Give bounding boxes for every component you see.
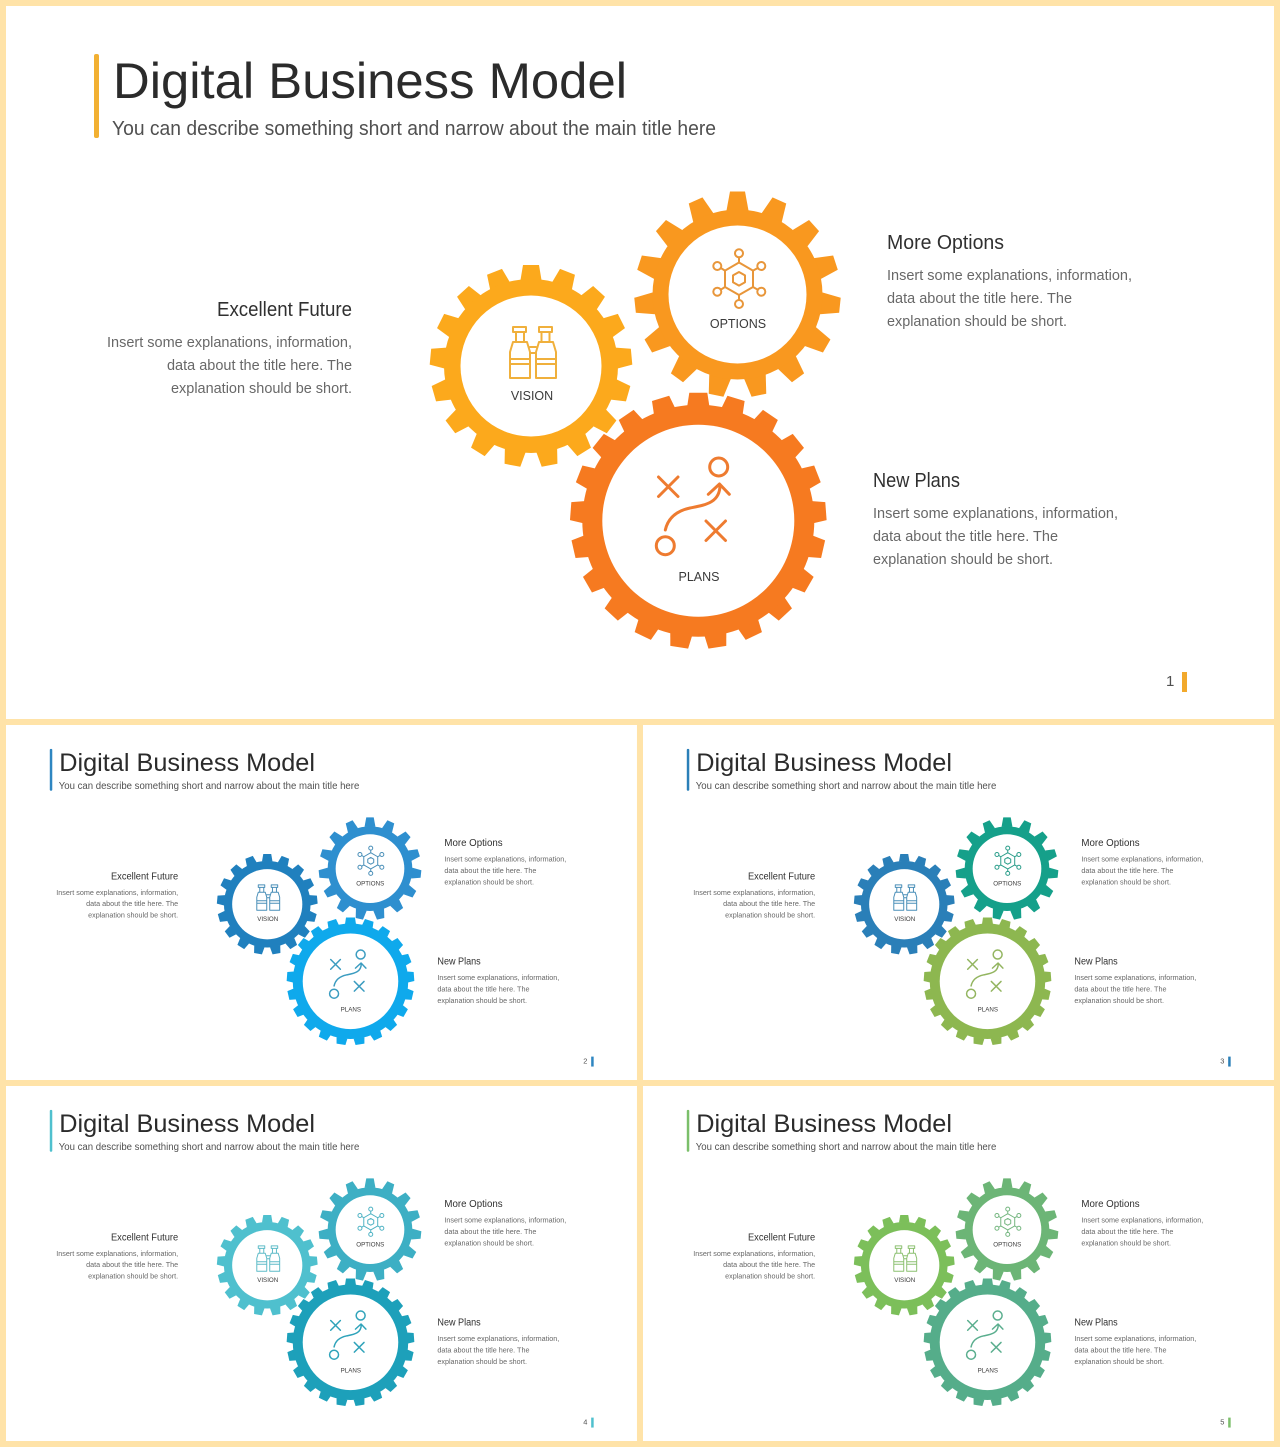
slide 3 text: more options: data about the title here. The [1081, 866, 1173, 875]
slide 5 text: new plans: Insert some explanations, information, [1074, 1334, 1196, 1343]
slide 5 text: more options: data about the title here. The [1081, 1227, 1173, 1236]
slide 2 gear: plans: PLANS [341, 1006, 361, 1013]
slide 5 gear: plans [924, 1279, 1051, 1406]
slide 2 text: more options [444, 838, 566, 886]
slide 1 gear: options [634, 192, 841, 398]
slide 1 text: excellent future: data about the title here. The [167, 357, 352, 374]
slide 3 text: new plans: explanation should be short. [1074, 996, 1164, 1005]
slide 5 background [643, 1086, 1274, 1441]
slide 4 text: more options: data about the title here. The [444, 1227, 536, 1236]
slide 5 text: new plans [1074, 1317, 1196, 1366]
slide 4 text: excellent future: Excellent Future [111, 1232, 179, 1243]
slide 1 text: excellent future: Excellent Future [217, 299, 352, 321]
slide 4 gear: options [318, 1178, 422, 1281]
slide 1 page number: 1 [1166, 673, 1174, 690]
slide 4 background [6, 1086, 637, 1441]
slide 4 text: new plans [437, 1317, 559, 1366]
slide 3 text: more options: explanation should be short. [1081, 877, 1171, 886]
slide 1 gear: vision [429, 265, 633, 467]
slide 2 gear: plans [287, 918, 414, 1045]
slide 2 gear: vision: VISION [257, 916, 278, 923]
slide 5 title accent bar [687, 1110, 689, 1152]
slide 5 subtitle: You can describe something short and narrow about the main title here [696, 1142, 997, 1153]
slide 2 page number: 2 [583, 1057, 587, 1066]
slide 4 gear: vision: VISION [257, 1277, 278, 1284]
slide 4 text: new plans: data about the title here. The [437, 1345, 529, 1354]
slide 4 text: excellent future: data about the title here. The [86, 1260, 178, 1269]
slide 1 text: excellent future: Insert some explanations, information, [107, 334, 352, 351]
slide 2 text: new plans: New Plans [437, 956, 481, 967]
slide 4 text: more options: Insert some explanations, information, [444, 1215, 566, 1224]
slide 5 page number [1220, 1418, 1231, 1428]
slide 2 text: excellent future: Insert some explanations, information, [56, 888, 178, 897]
slide 4 text: excellent future: explanation should be short. [88, 1272, 178, 1281]
slide 2 text: excellent future: explanation should be short. [88, 911, 178, 920]
panel: slide 2 blue [6, 725, 637, 1080]
slide 5 text: more options: Insert some explanations, information, [1081, 1215, 1203, 1224]
slide 2 text: new plans: data about the title here. The [437, 984, 529, 993]
slide 4 text: more options [444, 1199, 566, 1247]
slide 5 gear: options [955, 1178, 1059, 1281]
slide 1 gear: options: OPTIONS [710, 317, 766, 331]
slide 5 gear: vision: VISION [894, 1277, 915, 1284]
slide 5 title: Digital Business Model [696, 1110, 952, 1138]
slide 4 title accent bar [50, 1110, 52, 1152]
slide 3 text: more options: More Options [1081, 838, 1140, 849]
slide 3 gear: options: OPTIONS [993, 880, 1021, 887]
slide 1 text: more options: explanation should be short. [887, 313, 1067, 330]
slide 3 text: more options: Insert some explanations, information, [1081, 854, 1203, 863]
slide 3 gear: plans: PLANS [978, 1006, 998, 1013]
slide 1 subtitle: You can describe something short and narrow about the main title here [112, 118, 716, 140]
slide 1 text: new plans: New Plans [873, 470, 960, 492]
slide 3 page number: 3 [1220, 1057, 1224, 1066]
slide 5 text: new plans: explanation should be short. [1074, 1357, 1164, 1366]
slide 4 subtitle: You can describe something short and narrow about the main title here [59, 1142, 360, 1153]
slide 3 text: new plans [1074, 956, 1196, 1005]
slide 5 text: excellent future: data about the title here. The [723, 1260, 815, 1269]
slide 1 text: more options [887, 232, 1132, 330]
slide 2 text: more options: More Options [444, 838, 503, 849]
slide 3 subtitle: You can describe something short and narrow about the main title here [696, 781, 997, 792]
slide 4 gear: options: OPTIONS [356, 1241, 384, 1248]
slide 2 text: more options: data about the title here. The [444, 866, 536, 875]
slide 2 title accent bar [50, 749, 52, 791]
slide 1 text: new plans: data about the title here. The [873, 528, 1058, 545]
slide 4 text: more options: More Options [444, 1199, 503, 1210]
slide 3 page number [1220, 1057, 1231, 1067]
slide 4 gear: plans [287, 1279, 414, 1406]
slide 5 text: excellent future: explanation should be short. [725, 1272, 815, 1281]
slide 2 page number [583, 1057, 594, 1067]
slide 1 text: more options: More Options [887, 232, 1004, 254]
slide 1 text: excellent future [107, 299, 352, 397]
slide 4 text: excellent future [56, 1232, 179, 1281]
slide 4 text: excellent future: Insert some explanations, information, [56, 1249, 178, 1258]
panel: slide 5 green [643, 1086, 1274, 1441]
slide 2 text: excellent future: Excellent Future [111, 871, 179, 882]
slide 4 text: new plans: explanation should be short. [437, 1357, 527, 1366]
slide 1 text: new plans: explanation should be short. [873, 551, 1053, 568]
slide 1 text: new plans [873, 470, 1118, 568]
slide 3 gear: options [955, 817, 1059, 920]
slide 4 text: new plans: New Plans [437, 1317, 481, 1328]
slide 4 page number: 4 [583, 1418, 587, 1427]
panel: slide 4 teal [6, 1086, 637, 1441]
slide 3 text: new plans: New Plans [1074, 956, 1118, 967]
slide 1 text: more options: Insert some explanations, information, [887, 267, 1132, 284]
slide 1 title: Digital Business Model [113, 53, 627, 109]
slide 3 text: excellent future: Insert some explanations, information, [693, 888, 815, 897]
slide 4 text: more options: explanation should be short. [444, 1238, 534, 1247]
panel: slide 1 orange [6, 6, 1274, 719]
slide 1 gear: vision: VISION [511, 389, 553, 403]
slide 2 text: new plans: Insert some explanations, information, [437, 973, 559, 982]
slide 1 gear: plans: PLANS [678, 570, 720, 584]
slide 5 text: excellent future [693, 1232, 816, 1281]
slide 1 text: excellent future: explanation should be short. [171, 380, 352, 397]
slide 1 page number [1166, 672, 1187, 692]
slide 3 text: more options [1081, 838, 1203, 886]
slide 5 gear: options: OPTIONS [993, 1241, 1021, 1248]
slide 4 gear: vision [217, 1215, 318, 1316]
slide 3 text: excellent future: Excellent Future [748, 871, 816, 882]
slide 3 text: excellent future [693, 871, 816, 920]
slide 2 text: more options: explanation should be short. [444, 877, 534, 886]
slide 5 gear: vision [854, 1215, 955, 1316]
slide 2 text: more options: Insert some explanations, information, [444, 854, 566, 863]
slide 2 title: Digital Business Model [59, 749, 315, 777]
slide 2 text: excellent future: data about the title here. The [86, 899, 178, 908]
slide 4 gear: plans: PLANS [341, 1367, 361, 1374]
slide 1 background [6, 6, 1274, 719]
slide 4 title: Digital Business Model [59, 1110, 315, 1138]
slide 3 text: new plans: Insert some explanations, information, [1074, 973, 1196, 982]
slide 2 gear: vision [217, 854, 318, 955]
slide 1 text: more options: data about the title here. The [887, 290, 1072, 307]
slide 5 text: new plans: New Plans [1074, 1317, 1118, 1328]
slide 1 gear: plans [570, 393, 827, 649]
slide 3 title accent bar [687, 749, 689, 791]
slide 2 gear: options [318, 817, 422, 920]
slide 3 text: excellent future: data about the title here. The [723, 899, 815, 908]
slide 2 text: excellent future [56, 871, 179, 920]
slide 2 text: new plans: explanation should be short. [437, 996, 527, 1005]
slide 5 gear: plans: PLANS [978, 1367, 998, 1374]
slide 2 text: new plans [437, 956, 559, 1005]
slide 1 text: new plans: Insert some explanations, information, [873, 505, 1118, 522]
slide 5 text: excellent future: Excellent Future [748, 1232, 816, 1243]
slide 1 title accent bar [94, 54, 99, 138]
slide 5 text: more options [1081, 1199, 1203, 1247]
slide 5 page number: 5 [1220, 1418, 1224, 1427]
slide 2 background [6, 725, 637, 1080]
slide 3 gear: vision [854, 854, 955, 955]
slide 3 gear: plans [924, 918, 1051, 1045]
slide 5 text: more options: More Options [1081, 1199, 1140, 1210]
slide 2 subtitle: You can describe something short and narrow about the main title here [59, 781, 360, 792]
slide 5 text: more options: explanation should be short. [1081, 1238, 1171, 1247]
slide 3 gear: vision: VISION [894, 916, 915, 923]
slide 5 text: excellent future: Insert some explanations, information, [693, 1249, 815, 1258]
slide 3 text: new plans: data about the title here. The [1074, 984, 1166, 993]
slide 4 text: new plans: Insert some explanations, information, [437, 1334, 559, 1343]
slide 4 page number [583, 1418, 594, 1428]
slide 3 title: Digital Business Model [696, 749, 952, 777]
slide 2 gear: options: OPTIONS [356, 880, 384, 887]
slide 5 text: new plans: data about the title here. The [1074, 1345, 1166, 1354]
slide 3 background [643, 725, 1274, 1080]
slide 3 text: excellent future: explanation should be short. [725, 911, 815, 920]
panel: slide 3 blue green [643, 725, 1274, 1080]
